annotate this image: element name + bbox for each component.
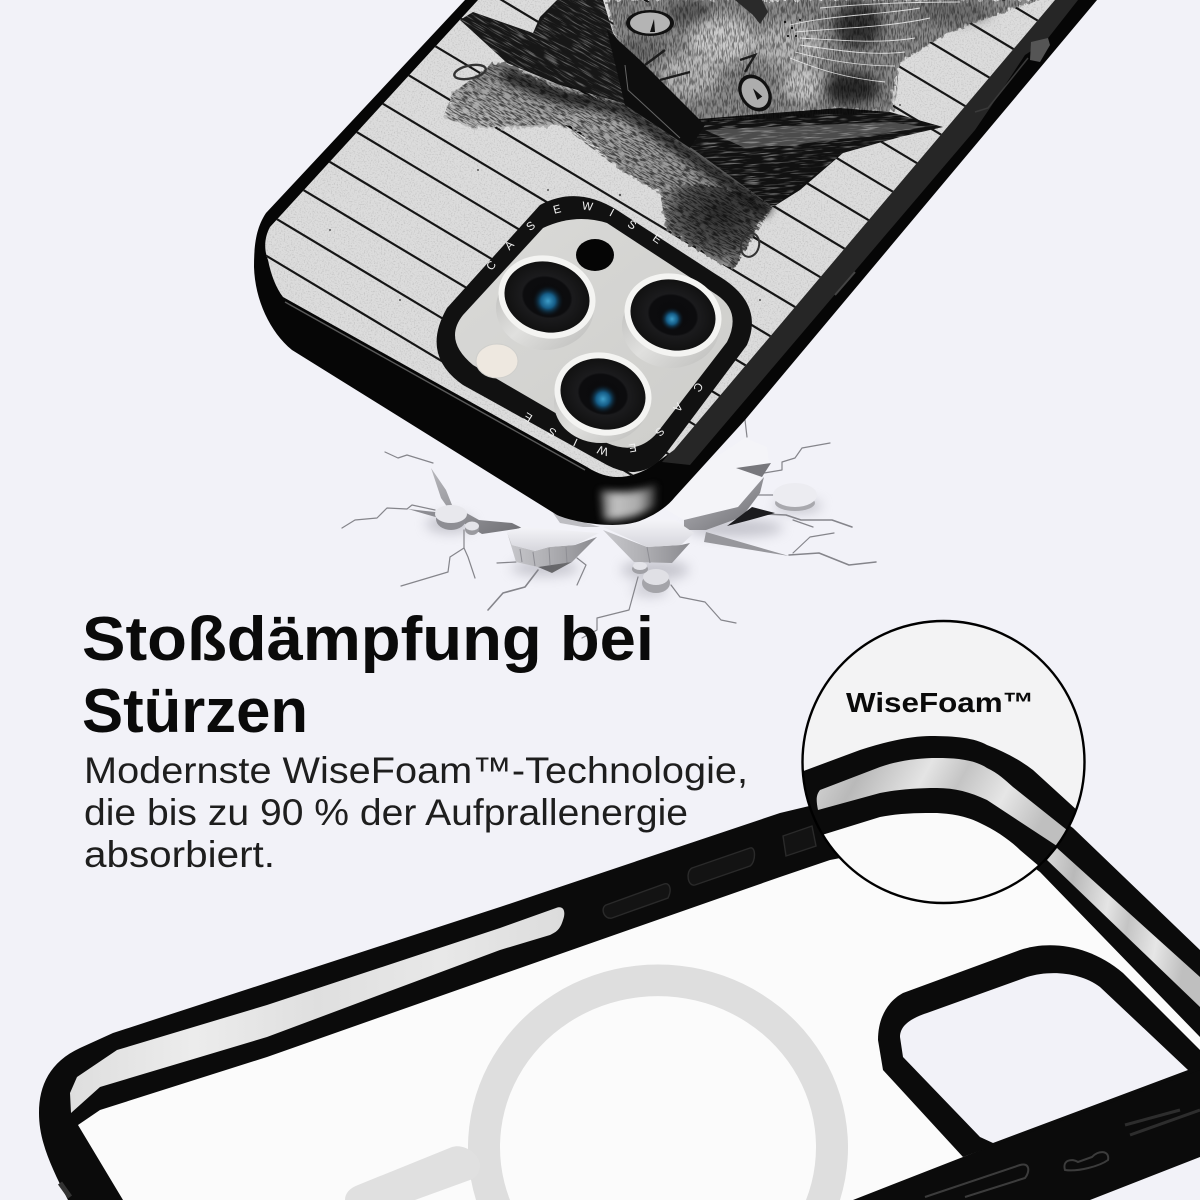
brand ring text top: S [625, 218, 638, 233]
brand ring text top: W [581, 200, 594, 214]
inside view of clear case [39, 770, 1200, 1200]
brand ring text bottom [522, 380, 705, 457]
heading: Stürzen [82, 677, 308, 746]
description text [84, 750, 748, 875]
brand ring text bottom: W [596, 443, 610, 457]
brand ring text top: E [552, 203, 563, 217]
soft shadows [426, 499, 822, 596]
whiskers [790, 2, 960, 82]
second ear [665, 184, 768, 267]
magnified outer band [804, 736, 1076, 866]
rock chunk center left [507, 527, 599, 573]
left bandana wing [460, 0, 625, 104]
black frame [39, 770, 1200, 1200]
foam strip right [1047, 848, 1200, 1007]
brand ring text bottom: A [670, 400, 684, 414]
brand ring text bottom: E [522, 409, 535, 424]
left ear [443, 63, 623, 128]
neck fur [540, 100, 773, 268]
description text: die bis zu 90 % der Aufprallenergie [84, 792, 688, 833]
bottom edge glint [1125, 1110, 1200, 1135]
brand ring text bottom: S [546, 424, 559, 439]
face lines [645, 50, 755, 80]
eye two [738, 74, 772, 112]
crack lines [342, 420, 876, 638]
nose [735, 0, 768, 24]
brand ring text bottom: C [690, 380, 705, 394]
side buttons [603, 826, 816, 918]
brand ring text top: A [503, 239, 517, 253]
specks [329, 104, 901, 301]
camera island [437, 196, 752, 472]
magnified content [804, 736, 1076, 868]
brand ring text top: S [524, 219, 538, 234]
brand ring text bottom: I [572, 436, 580, 448]
rock slab right [650, 438, 789, 556]
brand ring text bottom: S [652, 424, 666, 438]
magsafe bar [345, 1146, 480, 1200]
rock slab left [431, 468, 522, 534]
brand ring text top: C [484, 259, 499, 273]
stripes [266, 0, 1038, 476]
fur texture light [460, 0, 626, 104]
callout label: WiseFoam™ [846, 687, 1034, 718]
charging port details [925, 1152, 1108, 1197]
fur texture dark [444, 63, 772, 268]
camera cutout frame [878, 945, 1200, 1157]
lens three [545, 342, 661, 446]
magnified clear back [824, 813, 1038, 902]
brand ring text bottom: E [627, 440, 637, 454]
center strap [607, 30, 705, 148]
side button [835, 38, 1050, 295]
case body [254, 0, 1097, 525]
camera cutout opening [900, 973, 1188, 1143]
description text: Modernste WiseFoam™-Technologie, [84, 750, 748, 791]
cracked wall impact [342, 420, 876, 638]
heading [82, 605, 654, 746]
corner highlight [285, 302, 656, 520]
left slot [60, 1183, 70, 1197]
shading under bandana [505, 75, 770, 212]
magsafe ring [468, 964, 848, 1200]
whisker dots [784, 19, 801, 37]
phone with cat case [254, 0, 1097, 525]
right bandana wing [687, 108, 943, 207]
brand ring text top [484, 200, 664, 273]
ear ring left [453, 64, 487, 80]
magnified foam strip [817, 758, 1067, 848]
fur base [443, 63, 773, 268]
right side band [662, 0, 1078, 465]
ear ring right [740, 232, 760, 258]
face [607, 0, 1040, 123]
brand ring text top: E [650, 232, 664, 247]
small rock debris [435, 483, 817, 593]
eye one [626, 10, 674, 36]
face light patches [616, 0, 990, 104]
rock chunk center right [603, 520, 694, 563]
foam strip left [70, 907, 564, 1113]
lens two [615, 263, 731, 368]
description text: absorbiert. [84, 834, 275, 875]
brand ring text top: I [607, 207, 616, 219]
inner clear back [78, 835, 1200, 1200]
lidar hole [576, 239, 614, 271]
flash [476, 344, 518, 378]
lens one [489, 245, 605, 350]
cat illustration [443, 0, 1040, 270]
heading: Stoßdämpfung bei [82, 605, 654, 674]
WiseFoam magnifier circle [801, 620, 1086, 904]
camera plate [455, 219, 733, 448]
back face printed panel [265, 0, 1055, 477]
grey fold in right wing [705, 122, 925, 148]
circle outline [802, 621, 1084, 903]
